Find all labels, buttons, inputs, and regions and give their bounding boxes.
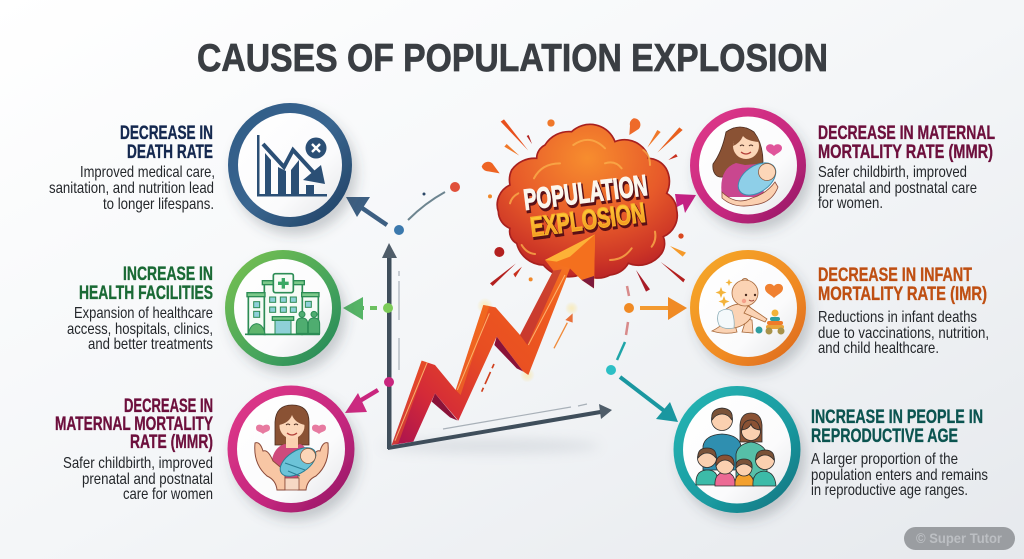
connector: death rate bbox=[346, 182, 460, 235]
chart floor shadow bbox=[380, 439, 600, 453]
panel: decrease in maternal mortality right bbox=[690, 108, 995, 224]
burst cloud bbox=[497, 124, 677, 278]
description: Safer childbirth, improved bbox=[818, 164, 967, 181]
description: access, hospitals, clinics, bbox=[67, 321, 213, 338]
description bbox=[63, 455, 213, 503]
connector: maternal left bbox=[345, 377, 394, 413]
ribbon highlights bbox=[395, 275, 565, 441]
heading: RATE (MMR) bbox=[130, 431, 213, 453]
ring: death rate bbox=[228, 103, 352, 227]
description: Improved medical care, bbox=[80, 164, 215, 181]
description bbox=[67, 305, 213, 353]
ribbon shading bbox=[392, 269, 562, 445]
heading bbox=[811, 406, 983, 447]
title: CAUSES OF POPULATION EXPLOSION bbox=[197, 37, 828, 80]
panel: decrease in infant mortality bbox=[690, 250, 989, 366]
arrow glows bbox=[477, 298, 578, 382]
description: Reductions in infant deaths bbox=[818, 309, 977, 326]
panel: increase in health facilities bbox=[67, 250, 341, 366]
cloud label: Population Explosion: POPULATION bbox=[522, 169, 649, 217]
heading: DECREASE IN bbox=[124, 395, 213, 417]
icon: crawling baby and toy bbox=[712, 278, 784, 334]
ring: infant bbox=[690, 250, 806, 366]
ribbon front bbox=[392, 234, 595, 445]
heading: HEALTH FACILITIES bbox=[79, 282, 213, 304]
ring: maternal bbox=[228, 386, 354, 512]
icon: mother in caring hands bbox=[255, 405, 328, 490]
heading: DECREASE IN bbox=[120, 122, 213, 144]
description: Expansion of healthcare bbox=[74, 305, 213, 322]
rising zigzag arrow bbox=[392, 234, 595, 445]
icon: family bbox=[696, 408, 776, 486]
small growth ticks bbox=[482, 313, 573, 392]
description bbox=[811, 451, 988, 499]
description bbox=[818, 309, 989, 357]
connector: infant bbox=[624, 286, 687, 335]
icon: hospital bbox=[245, 274, 320, 334]
central growth chart bbox=[380, 118, 686, 453]
cloud label: Population Explosion: EXPLOSION bbox=[530, 199, 648, 245]
heading: DEATH RATE bbox=[127, 141, 213, 163]
description: sanitation, and nutrition lead bbox=[49, 180, 214, 197]
description bbox=[49, 164, 215, 213]
description: Safer childbirth, improved bbox=[63, 455, 213, 472]
icon: falling chart bbox=[257, 135, 327, 196]
description bbox=[818, 164, 977, 212]
description: in reproductive age ranges. bbox=[811, 482, 968, 499]
heading bbox=[818, 122, 995, 163]
watermark: © Super Tutor bbox=[916, 531, 1003, 546]
horizontal axis with arrowhead bbox=[388, 404, 612, 450]
heading: DECREASE IN INFANT bbox=[818, 264, 972, 286]
axis accent dashes bbox=[399, 271, 587, 429]
heading bbox=[79, 263, 213, 304]
heading: MATERNAL MORTALITY bbox=[55, 413, 213, 435]
cloud label: Population Explosion bbox=[522, 169, 651, 245]
burst droplets bbox=[482, 118, 684, 281]
cloud label: Population Explosion: POPULATION bbox=[523, 171, 651, 219]
ring: reproductive age bbox=[674, 386, 800, 513]
description: prenatal and postnatal care bbox=[818, 180, 977, 197]
watermark bbox=[904, 527, 1015, 550]
description: to longer lifespans. bbox=[103, 196, 214, 213]
panel: increase in people in reproductive age bbox=[674, 386, 988, 513]
ring: maternal right bbox=[690, 108, 806, 224]
connector: maternal right bbox=[675, 194, 696, 213]
explosion cloud with label bbox=[482, 118, 686, 292]
cloud label: Population Explosion: EXPLOSION bbox=[528, 197, 647, 243]
description: due to vaccinations, nutrition, bbox=[818, 325, 989, 342]
description: prenatal and postnatal bbox=[82, 471, 213, 488]
vertical axis with arrowhead bbox=[382, 243, 397, 449]
ribbon dark undersides bbox=[432, 337, 523, 421]
heading: INCREASE IN bbox=[123, 263, 213, 285]
cloud inner puffs bbox=[510, 140, 655, 260]
connector: health facilities bbox=[343, 297, 393, 320]
description: A larger proportion of the bbox=[811, 451, 958, 468]
burst sparks bbox=[490, 119, 686, 292]
heading: REPRODUCTIVE AGE bbox=[811, 425, 958, 447]
description: for women. bbox=[818, 195, 883, 212]
heading bbox=[120, 122, 213, 163]
arrow head bbox=[545, 234, 595, 288]
panel: decrease in maternal mortality left bbox=[55, 386, 354, 512]
connector: reproductive age bbox=[606, 342, 678, 422]
panel: decrease in death rate bbox=[49, 103, 352, 227]
ring: health bbox=[225, 250, 341, 366]
description: care for women bbox=[123, 486, 213, 503]
description: and child healthcare. bbox=[818, 340, 939, 357]
description: and better treatments bbox=[88, 336, 213, 353]
description: population enters and remains bbox=[811, 467, 988, 484]
heading bbox=[55, 395, 213, 453]
icon: mother holding baby bbox=[713, 127, 782, 206]
heading bbox=[818, 264, 987, 305]
